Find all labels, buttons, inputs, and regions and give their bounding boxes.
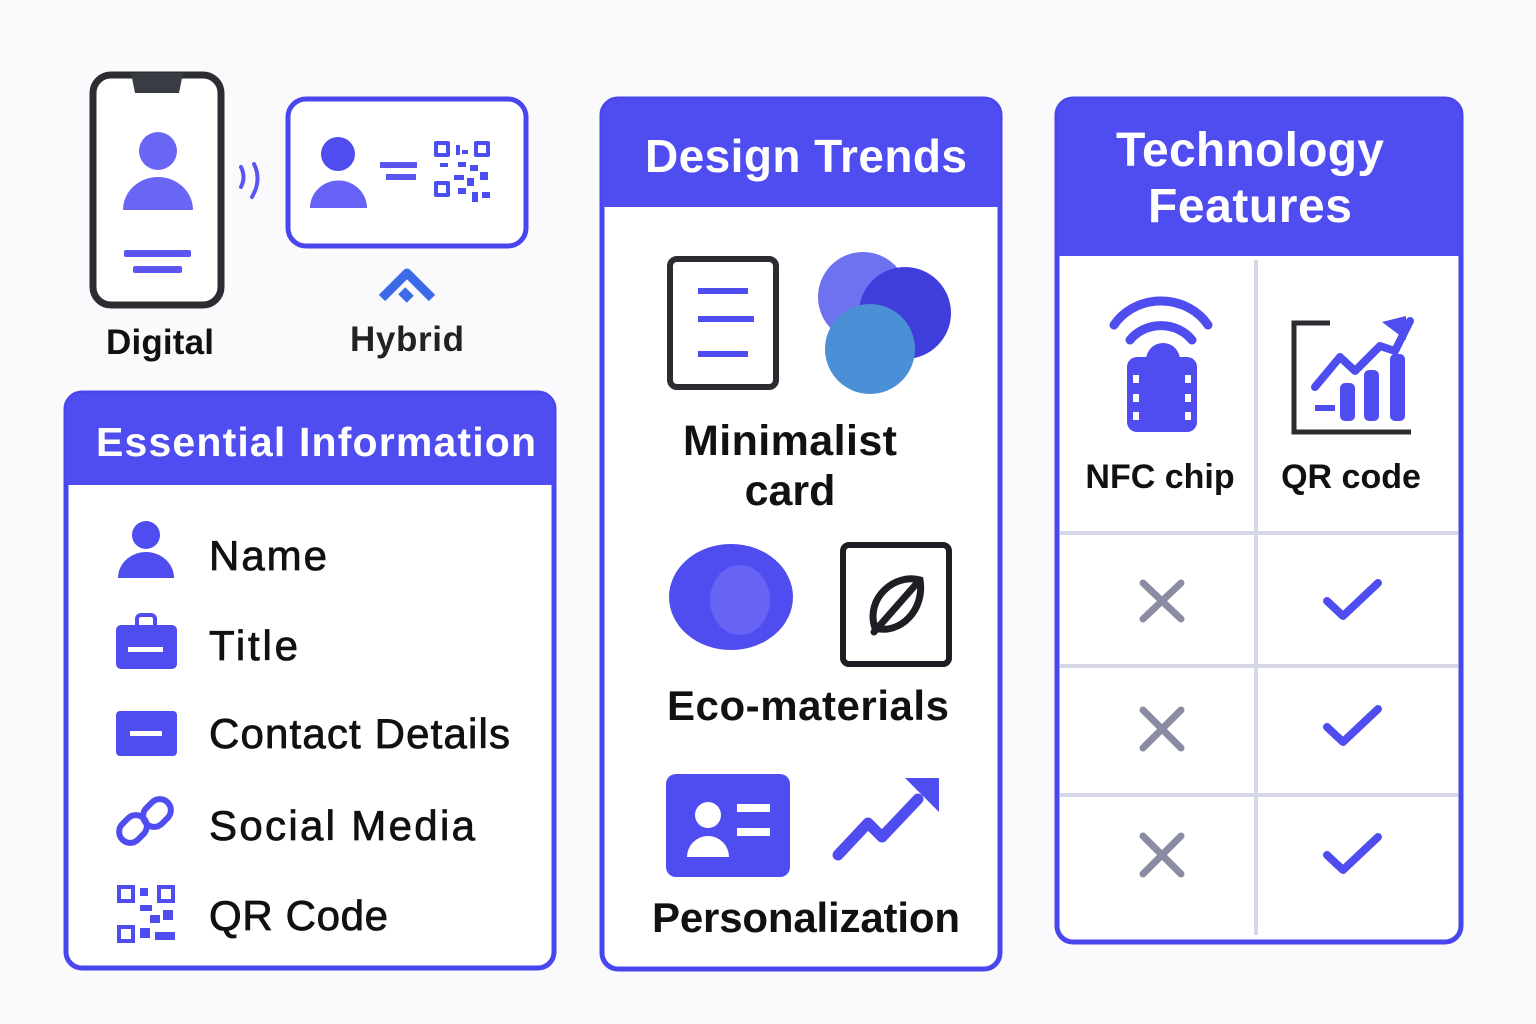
panel: Essential Information bbox=[66, 393, 554, 968]
marks: checks bbox=[1327, 583, 1378, 870]
item: QR Code bbox=[117, 885, 388, 943]
item: Name: Name bbox=[209, 532, 327, 579]
icon: phone digital bbox=[93, 73, 221, 305]
label: Hybrid: Hybrid bbox=[350, 320, 464, 359]
panel: Design Trends: card bbox=[745, 467, 835, 515]
panel: Design Trends bbox=[602, 99, 1000, 969]
icon: QR chart bbox=[1294, 316, 1411, 432]
icon: hybrid card bbox=[288, 99, 526, 246]
icon: signal waves bbox=[241, 164, 258, 197]
icon: hybrid chevron bbox=[382, 273, 432, 303]
icon: id card bbox=[666, 774, 790, 877]
label: QR code: QR code bbox=[1281, 458, 1421, 496]
item: Contact Details: Contact Details bbox=[209, 710, 510, 757]
icon: leaf box bbox=[843, 545, 949, 664]
icon: minimalist document bbox=[670, 259, 776, 387]
panel: Technology Features bbox=[1057, 99, 1461, 942]
label: NFC chip: NFC chip bbox=[1085, 458, 1235, 496]
item: Title bbox=[116, 615, 298, 669]
icon: trend arrow bbox=[838, 778, 939, 855]
icon: circles bbox=[818, 252, 951, 394]
label: Minimalist card: Minimalist bbox=[683, 417, 897, 465]
marks: crosses bbox=[1143, 583, 1181, 874]
item: QR Code: QR Code bbox=[209, 892, 388, 939]
item: Name bbox=[118, 521, 327, 579]
item: Title: Title bbox=[209, 622, 298, 669]
icon: eco blob bbox=[669, 544, 793, 650]
item: Social Media: Social Media bbox=[209, 802, 476, 849]
heading: Design Trends: Design Trends bbox=[645, 130, 967, 182]
panel: Technology Features: Features bbox=[1148, 180, 1352, 233]
heading: Essential Information: Essential Information bbox=[96, 419, 536, 465]
label: Eco-materials: Eco-materials bbox=[667, 682, 949, 729]
heading: Technology Features: Technology bbox=[1116, 124, 1384, 177]
icon: NFC chip bbox=[1114, 301, 1208, 432]
item: Social Media bbox=[115, 795, 476, 849]
label: Digital: Digital bbox=[106, 323, 214, 362]
label: Personalization: Personalization bbox=[652, 894, 960, 941]
